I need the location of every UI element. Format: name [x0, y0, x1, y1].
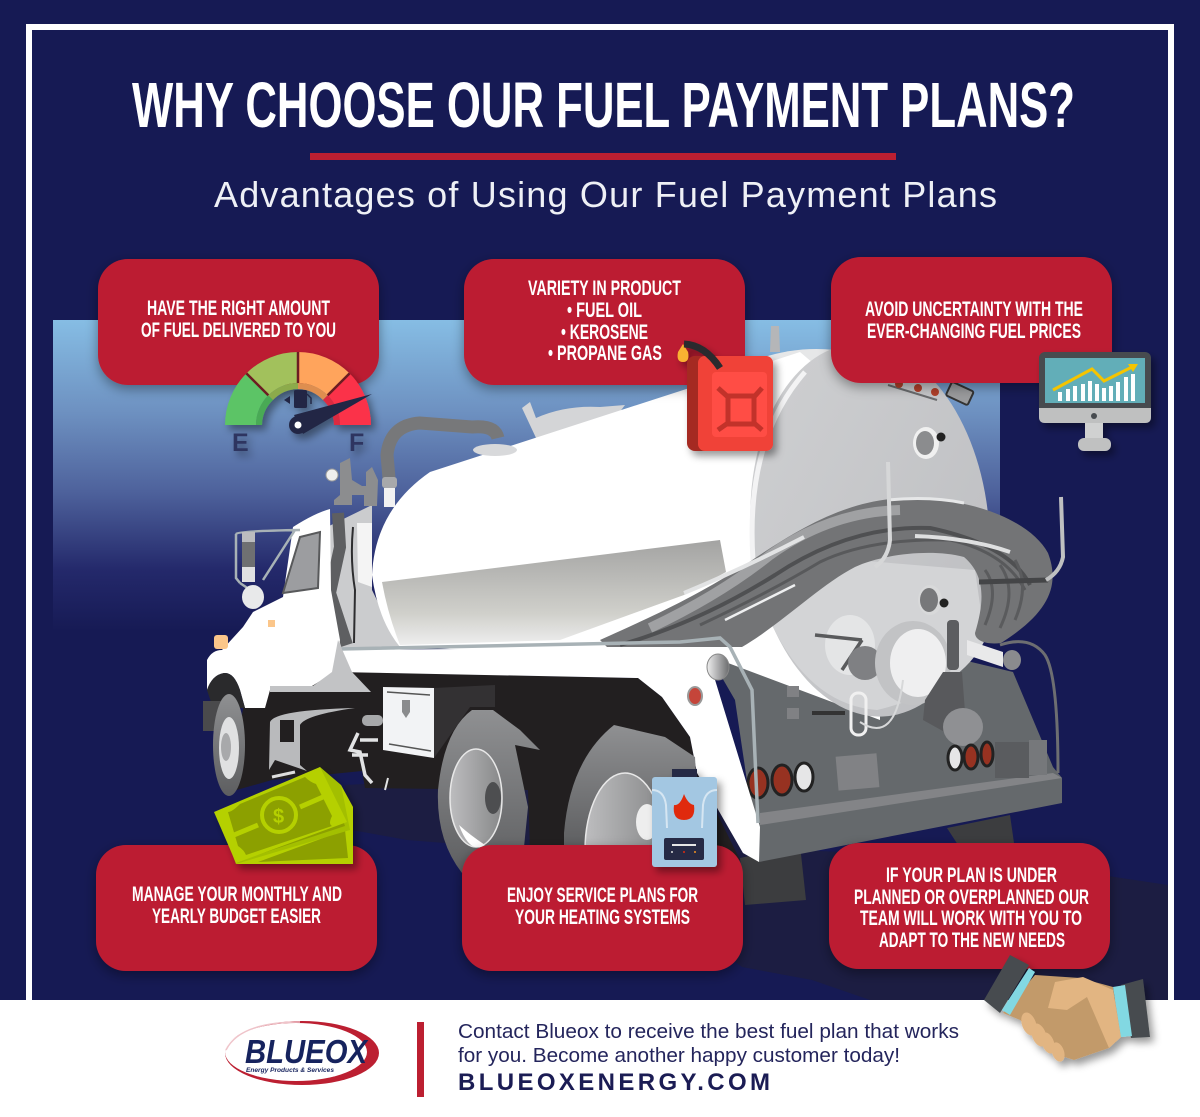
- card: variety in product: [464, 259, 745, 385]
- truck: cap lights and plate: [888, 380, 974, 405]
- truck: marker lights: [214, 635, 228, 649]
- icon: handshake: [984, 955, 1150, 1063]
- card: budget: MANAGE YOUR MONTHLY AND: [132, 883, 342, 906]
- truck: rear valves: [787, 615, 1021, 791]
- icon: fuel gauge: [225, 352, 372, 457]
- icon: heater: [652, 769, 717, 867]
- footer message: for you. Become another happy customer today!: [458, 1044, 900, 1067]
- card: right amount of fuel: HAVE THE RIGHT AMOUNT: [147, 297, 330, 320]
- truck: cab body: [207, 509, 340, 708]
- truck: cab window: [283, 532, 320, 593]
- card: budget: YEARLY BUDGET EASIER: [152, 905, 321, 928]
- truck: front wheel: [203, 694, 245, 796]
- truck: tank pipe: [387, 423, 498, 478]
- card: service plans: ENJOY SERVICE PLANS FOR: [507, 884, 698, 907]
- card: right amount of fuel: OF FUEL DELIVERED TO YOU: [141, 319, 336, 342]
- footer message: Contact Blueox to receive the best fuel plan that works: [458, 1020, 959, 1043]
- truck: rear bumper panel: [706, 650, 1062, 862]
- truck: tank body: [372, 352, 880, 720]
- ground shadow: [345, 770, 1168, 1000]
- truck: rear wheel two: [564, 725, 700, 927]
- card: avoid uncertainty: AVOID UNCERTAINTY WITH THE: [865, 298, 1083, 321]
- card: avoid uncertainty: EVER-CHANGING FUEL PRICES: [867, 320, 1081, 343]
- logo: [225, 1021, 379, 1085]
- truck: tank lower band: [382, 540, 726, 645]
- logo: Energy Products & Services: [246, 1068, 335, 1074]
- truck: hand rails on hose: [875, 462, 890, 567]
- truck: black chassis: [226, 672, 740, 860]
- card: variety in product: VARIETY IN PRODUCT: [528, 277, 681, 300]
- truck: white pillar and wire: [357, 523, 372, 587]
- icon: fuel gauge: F: [349, 429, 364, 457]
- card: adapt plan: ADAPT TO THE NEW NEEDS: [879, 929, 1065, 952]
- truck: white bed: [335, 647, 760, 862]
- subtitle: Advantages of Using Our Fuel Payment Plans: [214, 174, 997, 215]
- icon: price chart monitor: [1039, 352, 1151, 451]
- card: variety in product: • PROPANE GAS: [548, 342, 662, 365]
- truck: tool box: [383, 685, 495, 758]
- logo: BLUEOX: [245, 1033, 369, 1070]
- card: adapt plan: [829, 843, 1110, 969]
- card: right amount of fuel: [98, 259, 379, 385]
- title rule: [310, 153, 896, 160]
- truck: rear wheel one: [438, 710, 540, 878]
- truck: underbody blocks: [740, 845, 806, 905]
- footer message: [458, 1020, 959, 1067]
- truck: lower cap disc: [771, 560, 985, 710]
- truck: hatch on tank: [522, 402, 625, 440]
- card: variety in product: • KEROSENE: [561, 321, 648, 344]
- truck: tank end cap: [735, 333, 1005, 727]
- card: service plans: [462, 845, 743, 971]
- footer band: [0, 1000, 1200, 1117]
- icon: fuel gauge: E: [232, 429, 249, 457]
- sky gradient panel: [53, 320, 1000, 632]
- footer URL: BLUEOXENERGY.COM: [458, 1069, 770, 1096]
- card: budget: [96, 845, 377, 971]
- icon: money: $: [273, 806, 284, 828]
- tanker truck: [203, 326, 1063, 927]
- icon: money: [214, 767, 353, 864]
- icon: jerry can: [678, 344, 773, 451]
- truck: cap valve upper: [913, 427, 939, 459]
- card: adapt plan: IF YOUR PLAN IS UNDER: [886, 864, 1057, 887]
- truck: stack fittings: [334, 458, 378, 506]
- card: service plans: YOUR HEATING SYSTEMS: [515, 906, 690, 929]
- card: variety in product: • FUEL OIL: [567, 299, 642, 322]
- truck: cap valve lower: [918, 585, 942, 615]
- truck: fuel tank and steps: [269, 708, 388, 790]
- card: adapt plan: TEAM WILL WORK WITH YOU TO: [860, 907, 1082, 930]
- truck: coiled hose: [600, 498, 1053, 647]
- truck: stack hose: [330, 513, 347, 645]
- truck: tail lights: [748, 742, 993, 798]
- truck: mirror: [236, 530, 300, 598]
- card: avoid uncertainty: [831, 257, 1112, 383]
- footer divider: [417, 1022, 424, 1097]
- truck: hose strap: [979, 580, 1048, 582]
- truck: cab back wall: [327, 505, 400, 672]
